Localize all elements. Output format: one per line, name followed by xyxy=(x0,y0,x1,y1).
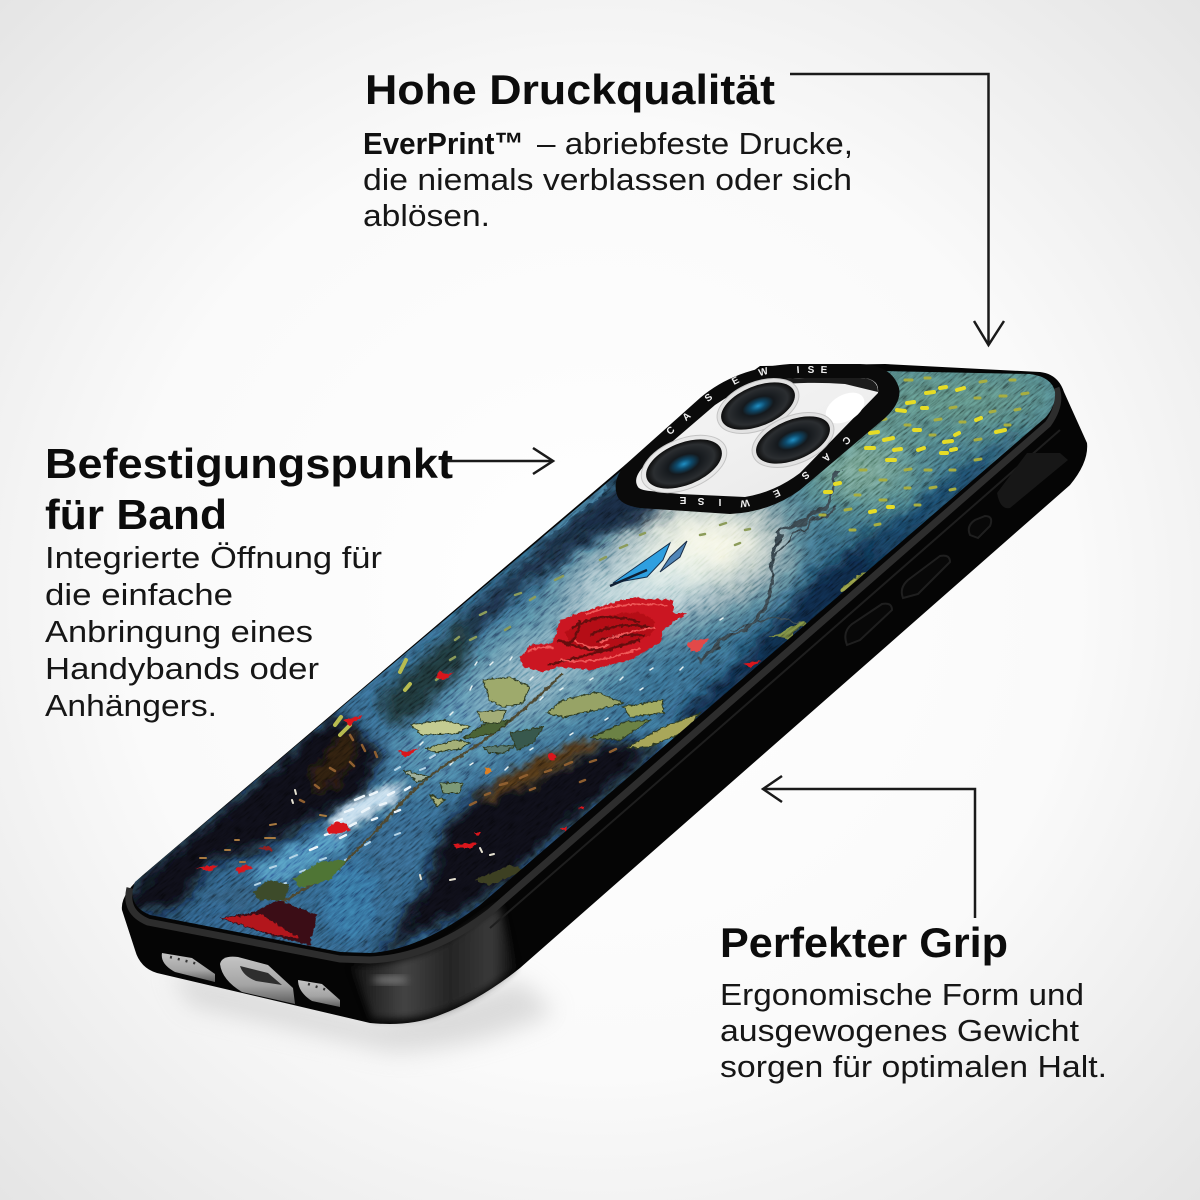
description: Ergonomische Form und xyxy=(720,977,1084,1012)
description xyxy=(720,977,1107,1084)
description: Anhängers. xyxy=(45,688,217,723)
heading: Perfekter Grip xyxy=(720,919,1008,966)
artwork panel xyxy=(132,371,1056,953)
description: ablösen. xyxy=(363,198,490,233)
description: sorgen für optimalen Halt. xyxy=(720,1049,1107,1084)
arrow: grip xyxy=(763,776,975,918)
fallen petals xyxy=(195,638,762,873)
dark masses xyxy=(120,420,1030,960)
brand lettering bottom: A xyxy=(820,450,832,463)
description xyxy=(45,540,382,723)
camera island xyxy=(616,364,899,514)
heading: Hohe Druckqualität xyxy=(365,66,775,113)
brand lettering top: I xyxy=(796,365,800,376)
branches xyxy=(700,470,838,660)
camera window xyxy=(636,378,878,497)
lens left xyxy=(633,424,735,504)
arrow: print quality xyxy=(790,74,1004,345)
description: die einfache xyxy=(45,577,233,612)
usb port xyxy=(220,957,295,1004)
brand lettering bottom: W xyxy=(739,496,750,509)
left speaker xyxy=(162,953,215,982)
description: die niemals verblassen oder sich xyxy=(363,162,852,197)
brand lettering top: S xyxy=(808,365,815,376)
top inner shadow xyxy=(745,378,878,392)
brush stroke texture xyxy=(132,371,1055,953)
description: EverPrint™ xyxy=(363,126,524,161)
painted forest background xyxy=(132,371,1056,953)
right speaker xyxy=(298,980,340,1007)
brand lettering top xyxy=(665,365,828,438)
lighter band on dark tree xyxy=(544,484,608,536)
brand lettering top: S xyxy=(703,392,715,405)
brand lettering top: E xyxy=(730,375,742,388)
callout: print quality xyxy=(363,66,853,233)
brand lettering bottom: S xyxy=(697,495,704,506)
brand lettering top: A xyxy=(681,411,693,424)
phone case with artwork xyxy=(122,364,1088,1026)
description: – abriebfeste Drucke, xyxy=(537,126,853,161)
flash xyxy=(820,386,870,430)
lens right xyxy=(744,402,842,478)
side buttons xyxy=(845,453,1068,645)
description: Anbringung eines xyxy=(45,614,313,649)
yellow foliage flecks xyxy=(335,378,1028,735)
callout: strap attachment xyxy=(45,440,453,723)
red reflected rose xyxy=(220,900,317,945)
brand lettering bottom: I xyxy=(718,496,721,507)
phone drop shadow xyxy=(170,970,555,1052)
heading: Befestigungspunkt xyxy=(45,440,453,487)
brand lettering bottom xyxy=(679,433,852,509)
description: Integrierte Öffnung für xyxy=(45,540,382,575)
heading: für Band xyxy=(45,491,227,538)
glossy bottom corner xyxy=(352,905,515,1019)
rose xyxy=(520,598,687,672)
brand lettering top: W xyxy=(757,366,770,379)
brand lettering bottom: C xyxy=(840,433,852,446)
arrow: strap attachment xyxy=(445,448,553,474)
water highlights xyxy=(198,726,606,938)
description: Handybands oder xyxy=(45,651,319,686)
camera frame xyxy=(616,364,899,514)
case body xyxy=(122,364,1087,1024)
bottom ports xyxy=(162,953,340,1007)
brand lettering top: E xyxy=(820,365,828,376)
description: ausgewogenes Gewicht xyxy=(720,1013,1079,1048)
brand lettering bottom: E xyxy=(679,494,686,505)
heading xyxy=(45,440,453,538)
brand lettering top: C xyxy=(665,425,677,438)
water and rain flecks xyxy=(200,618,723,885)
brand lettering bottom: S xyxy=(799,468,811,481)
description xyxy=(363,126,853,233)
moss xyxy=(770,572,868,640)
butterfly xyxy=(610,541,687,586)
bezel rim xyxy=(129,388,1058,960)
brand lettering bottom: E xyxy=(771,486,782,499)
callout: grip xyxy=(720,919,1107,1084)
gloss highlight xyxy=(372,977,408,983)
lens top xyxy=(709,368,807,444)
side groove xyxy=(490,430,1060,928)
rose stem and leaves xyxy=(253,673,700,917)
